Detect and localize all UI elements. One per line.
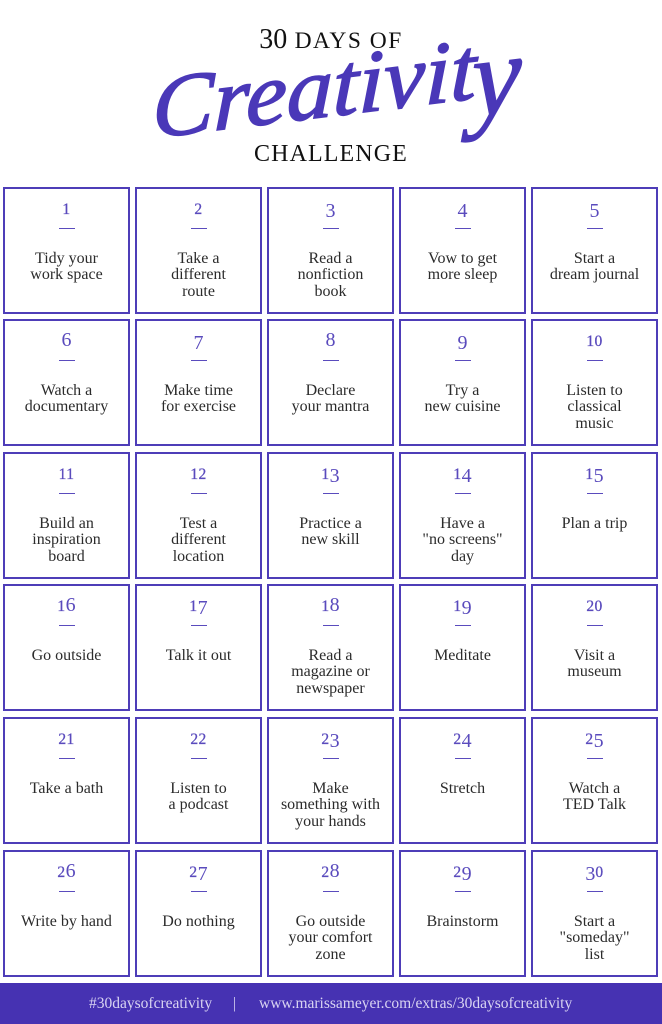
day 15: Plan a trip (562, 514, 627, 532)
day 29: 29 (453, 863, 472, 885)
day 17: 17 (189, 597, 208, 619)
day 25: Watch a (569, 780, 620, 796)
day 19: 19 (453, 597, 472, 619)
day 28 (267, 850, 394, 977)
day 22 (135, 717, 262, 844)
day 1: work space (30, 266, 103, 283)
day 8 (267, 319, 394, 446)
day 18 (267, 584, 394, 711)
day 18: newspaper (296, 680, 365, 697)
day 18: Read a (308, 646, 352, 664)
day 19 (399, 584, 526, 711)
day 20: 20 (586, 598, 603, 615)
day 25: TED Talk (563, 796, 626, 813)
day 3: Read a (308, 250, 352, 266)
day 6: 6 (62, 329, 72, 351)
day 13: new skill (301, 531, 360, 548)
day 1 (3, 187, 130, 314)
day 20: Visit a (574, 646, 615, 664)
day 21: Take a bath (30, 780, 103, 796)
day 21: 21 (58, 731, 75, 748)
day 16 (3, 584, 130, 711)
day 29 (399, 850, 526, 977)
day 5 (531, 187, 658, 314)
day 4: Vow to get (428, 250, 497, 266)
footer url: www.marissameyer.com/extras/30daysofcreativity (259, 995, 572, 1012)
day 16: Go outside (32, 646, 101, 664)
heading: 30 days of: 30 DAYS OF (259, 24, 403, 55)
day 22: a podcast (168, 796, 228, 813)
day 4 (399, 187, 526, 314)
day 1: Tidy your (35, 250, 98, 266)
heading: Creativity script: y (461, 11, 523, 143)
day 20: museum (567, 663, 622, 680)
day 13 (267, 452, 394, 579)
footer bar (0, 983, 662, 1024)
day 8: 8 (326, 329, 336, 351)
day 17: Talk it out (166, 646, 231, 664)
day 26 (3, 850, 130, 977)
day 3 (267, 187, 394, 314)
day 11: 11 (59, 466, 74, 483)
day 23: 23 (321, 730, 340, 752)
day 2 (135, 187, 262, 314)
day 12: location (173, 548, 224, 565)
day 28: zone (315, 946, 346, 963)
day 10: classical (567, 398, 622, 415)
day 11 (3, 452, 130, 579)
day 19: Meditate (434, 646, 491, 664)
day 12: different (171, 531, 226, 548)
day 5: dream journal (550, 266, 639, 283)
day 13: Practice a (299, 514, 362, 532)
day 27 (135, 850, 262, 977)
day 4: more sleep (428, 266, 497, 283)
day 13: 13 (321, 465, 340, 487)
day 25: 25 (585, 730, 604, 752)
day 26: 26 (57, 860, 76, 882)
day 6 (3, 319, 130, 446)
day 10 (531, 319, 658, 446)
day 28: your comfort (288, 929, 372, 946)
day 9: Try a (446, 382, 479, 398)
day 9 (399, 319, 526, 446)
day 7: 7 (194, 332, 204, 354)
day 3: book (314, 283, 346, 300)
day 25 (531, 717, 658, 844)
day 15: 15 (585, 465, 604, 487)
day 14: Have a (440, 514, 485, 532)
day 24: Stretch (440, 780, 485, 796)
day 12: Test a (180, 514, 217, 532)
day 23: Make (312, 780, 349, 796)
day 6: documentary (25, 398, 108, 415)
day 2: different (171, 266, 226, 283)
day 14: 14 (453, 465, 472, 487)
day 24: 24 (453, 730, 472, 752)
day 15 (531, 452, 658, 579)
day 5: Start a (574, 250, 615, 266)
footer divider: | (233, 995, 236, 1012)
day 14 (399, 452, 526, 579)
day 22: Listen to (170, 780, 227, 796)
day 18: magazine or (291, 663, 370, 680)
day 11: Build an (39, 514, 94, 532)
day 14: "no screens" (422, 531, 503, 548)
day 12: 12 (190, 466, 207, 483)
day 4: 4 (458, 200, 468, 222)
day 2: route (182, 283, 215, 300)
day 26: Write by hand (21, 912, 112, 930)
day 29: Brainstorm (426, 912, 498, 930)
day 10: music (575, 415, 614, 432)
day 11: inspiration (32, 531, 101, 548)
day 2: Take a (178, 250, 219, 266)
day 6: Watch a (41, 382, 92, 398)
day 27: Do nothing (162, 912, 235, 930)
day 7 (135, 319, 262, 446)
day 23: your hands (295, 813, 366, 830)
day 2: 2 (194, 201, 203, 218)
day 30 (531, 850, 658, 977)
day 23: something with (281, 796, 380, 813)
day 9: new cuisine (424, 398, 500, 415)
day 30: list (585, 946, 604, 963)
day 8: Declare (306, 382, 355, 398)
day 28: Go outside (296, 912, 365, 930)
heading: challenge: CHALLENGE (254, 141, 408, 167)
day 21 (3, 717, 130, 844)
day 18: 18 (321, 594, 340, 616)
day 30: "someday" (560, 929, 629, 946)
day 22: 22 (190, 731, 207, 748)
day 10: 10 (586, 333, 603, 350)
day 16: 16 (57, 594, 76, 616)
heading: Creativity script: Creativit (152, 20, 479, 158)
day 11: board (48, 548, 85, 565)
day 5: 5 (590, 200, 600, 222)
day 3: nonfiction (298, 266, 363, 283)
day 7: Make time (164, 382, 233, 398)
footer hashtag: #30daysofcreativity (89, 995, 212, 1012)
day 3: 3 (326, 200, 336, 222)
day 24 (399, 717, 526, 844)
day 1: 1 (62, 201, 71, 218)
day 9: 9 (458, 332, 468, 354)
day 17 (135, 584, 262, 711)
day 7: for exercise (161, 398, 236, 415)
day 28: 28 (321, 860, 340, 882)
day 30: 30 (585, 863, 604, 885)
day 27: 27 (189, 863, 208, 885)
day 10: Listen to (566, 382, 623, 398)
day 12 (135, 452, 262, 579)
day 30: Start a (574, 912, 615, 930)
day 20 (531, 584, 658, 711)
day grid (3, 187, 658, 977)
day 14: day (451, 548, 474, 565)
day 8: your mantra (292, 398, 369, 415)
day 23 (267, 717, 394, 844)
